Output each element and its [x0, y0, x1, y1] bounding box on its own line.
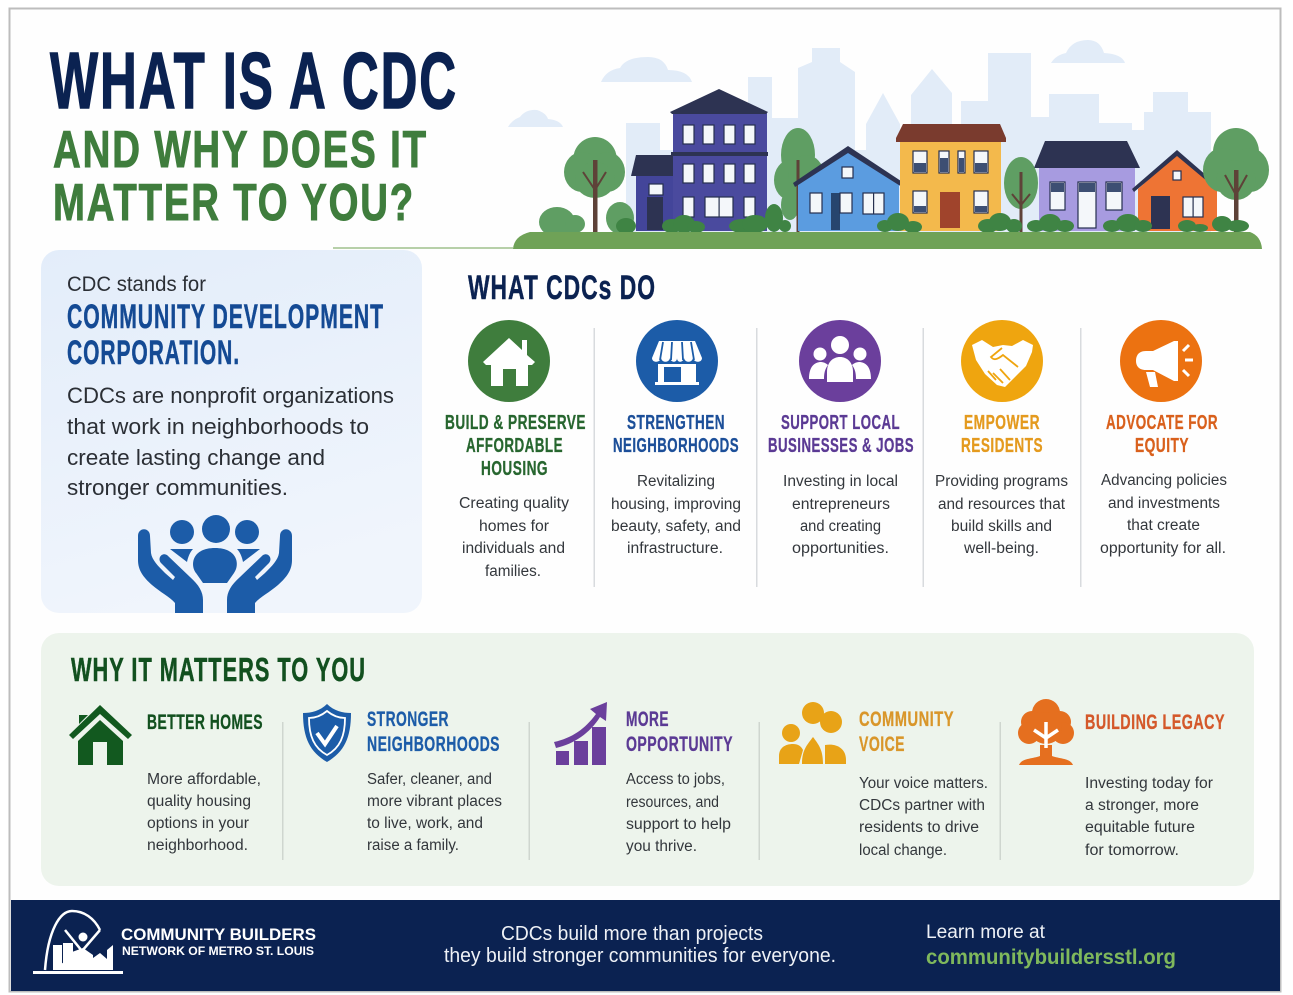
description: Investing today for [1085, 775, 1213, 792]
description: equitable future [1085, 819, 1195, 836]
heading: STRONGER [367, 708, 449, 731]
text: definition: create lasting change and [67, 445, 325, 470]
tagline: they build stronger communities for everyone. [444, 945, 836, 967]
text: stands for: CDC stands for [67, 273, 206, 296]
description: individuals and [462, 540, 565, 557]
heading: STRENGTHEN [627, 412, 725, 434]
logo text: COMMUNITY BUILDERS [121, 926, 316, 944]
text: definition: CDCs are nonprofit organizations [67, 383, 394, 408]
back trees [539, 128, 824, 237]
description [1100, 472, 1227, 557]
description: More affordable, [147, 771, 261, 788]
description: a stronger, more [1085, 797, 1199, 814]
lavender house [1034, 141, 1140, 231]
heading: community development corporation: COMMUNITY DEVELOPMENT [67, 298, 384, 336]
purple house [670, 89, 768, 231]
description: infrastructure. [627, 540, 723, 557]
description: homes for [479, 518, 549, 535]
heading: COMMUNITY [859, 708, 954, 731]
item: community voice [779, 702, 988, 859]
panel: CDC definition [41, 250, 422, 613]
icon: house [468, 320, 550, 402]
description [626, 771, 731, 855]
heading: NEIGHBORHOODS [613, 435, 739, 457]
description [459, 495, 569, 580]
description: quality housing [147, 793, 251, 810]
description [611, 473, 741, 557]
description: CDCs partner with [859, 797, 985, 814]
logo text [121, 926, 316, 958]
description: you thrive. [626, 838, 697, 855]
bushes [616, 204, 1249, 234]
title: WHAT IS A CDC [50, 36, 458, 125]
description: raise a family. [367, 837, 459, 854]
description: Investing in local [783, 473, 898, 490]
heading: MORE [626, 708, 669, 731]
item: stronger neighborhoods [303, 704, 502, 854]
heading: SUPPORT LOCAL [781, 412, 900, 434]
description: well-being. [963, 540, 1039, 557]
heading: BETTER HOMES [147, 711, 263, 734]
heading [859, 708, 954, 756]
description [935, 473, 1068, 557]
description: for tomorrow. [1085, 842, 1179, 859]
tree [564, 137, 625, 232]
heading [445, 412, 586, 480]
heading: what CDCs do: WHAT CDCs DO [468, 269, 656, 307]
heading [626, 708, 733, 756]
description: Your voice matters. [859, 775, 988, 792]
icon: group of people [799, 320, 881, 402]
description: support to help [626, 816, 731, 833]
icon: handshake [961, 320, 1043, 402]
description: Safer, cleaner, and [367, 771, 492, 788]
heading [961, 412, 1043, 457]
description: residents to drive [859, 819, 979, 836]
description [367, 771, 502, 854]
heading: EMPOWER [964, 412, 1040, 434]
footer band [11, 900, 1280, 991]
description [783, 473, 898, 557]
tagline: CDCs build more than projects [501, 923, 763, 945]
orange house [1132, 150, 1222, 231]
clouds [601, 57, 692, 82]
description: beauty, safety, and [611, 518, 741, 535]
icon: shield [303, 704, 351, 762]
column: empower residents [935, 320, 1068, 557]
column: strengthen neighborhoods [611, 320, 741, 557]
heading: AFFORDABLE [466, 435, 563, 457]
front trees [1004, 128, 1269, 232]
description: more vibrant places [367, 793, 502, 810]
skyline [626, 48, 1211, 232]
heading: RESIDENTS [961, 435, 1043, 457]
purple wing [631, 155, 674, 231]
title: MATTER TO YOU? [53, 174, 415, 232]
call to action: Learn more at [926, 922, 1046, 943]
heading: BUILD & PRESERVE [445, 412, 586, 434]
description: opportunity for all. [1100, 540, 1226, 557]
description: and investments [1108, 495, 1220, 512]
logo text: NETWORK OF METRO ST. LOUIS [122, 946, 314, 958]
heading: OPPORTUNITY [626, 733, 733, 756]
heading [768, 412, 914, 457]
title [50, 36, 458, 232]
title: AND WHY DOES IT [53, 121, 428, 179]
call to action: communitybuildersstl.org [926, 946, 1176, 969]
description: entrepreneurs [792, 496, 890, 513]
description: housing, improving [611, 496, 741, 513]
icon: megaphone [1120, 320, 1202, 402]
description: Revitalizing [637, 473, 715, 490]
description: Providing programs [935, 473, 1068, 490]
column: advocate for equity [1100, 320, 1227, 557]
heading [1106, 412, 1218, 457]
icon: people [779, 702, 846, 764]
heading: VOICE [859, 733, 905, 756]
heading: BUSINESSES & JOBS [768, 435, 914, 457]
description: to live, work, and [367, 815, 483, 832]
description [147, 771, 261, 854]
text: definition: stronger communities. [67, 475, 288, 500]
text: definition [67, 383, 394, 500]
description: that create [1127, 517, 1200, 534]
column: build and preserve [445, 320, 586, 580]
icon: tree [1018, 699, 1074, 765]
panel: why it matters [41, 633, 1254, 886]
description [859, 775, 988, 859]
description [1085, 775, 1213, 859]
description: Advancing policies [1101, 472, 1227, 489]
description: resources, and [626, 794, 719, 811]
icon: storefront [636, 320, 718, 402]
text: definition: that work in neighborhoods to [67, 414, 369, 439]
heading: community development corporation [67, 298, 384, 372]
illustration: neighborhood houses and skyline [333, 40, 1269, 249]
description: families. [485, 563, 541, 580]
description: local change. [859, 842, 947, 859]
blue house [793, 146, 904, 231]
item: building legacy [1018, 699, 1225, 859]
description: and creating [800, 518, 881, 535]
heading: community development corporation: CORPORATION. [67, 334, 240, 372]
column: support local businesses [768, 320, 914, 557]
logo: arch and skyline [33, 911, 123, 974]
description: Access to jobs, [626, 771, 725, 788]
heading: why it matters to you: WHY IT MATTERS TO YOU [71, 651, 366, 688]
heading: BUILDING LEGACY [1085, 711, 1225, 734]
heading: EQUITY [1135, 435, 1189, 457]
ground [513, 232, 1262, 249]
description: neighborhood. [147, 837, 248, 854]
icon: growth chart [554, 702, 607, 765]
heading: HOUSING [481, 458, 548, 480]
item: better homes [69, 705, 263, 854]
icon: hands holding people [138, 515, 292, 613]
description: opportunities. [792, 540, 889, 557]
heading [367, 708, 500, 756]
description: Creating quality [459, 495, 569, 512]
tagline [444, 923, 836, 967]
heading: ADVOCATE FOR [1106, 412, 1218, 434]
item: more opportunity [554, 702, 733, 855]
heading: NEIGHBORHOODS [367, 733, 500, 756]
description: options in your [147, 815, 249, 832]
call to action [926, 922, 1176, 969]
yellow house [896, 124, 1006, 231]
description: and resources that [938, 496, 1066, 513]
description: build skills and [951, 518, 1052, 535]
heading [613, 412, 739, 457]
icon: house [69, 705, 132, 765]
